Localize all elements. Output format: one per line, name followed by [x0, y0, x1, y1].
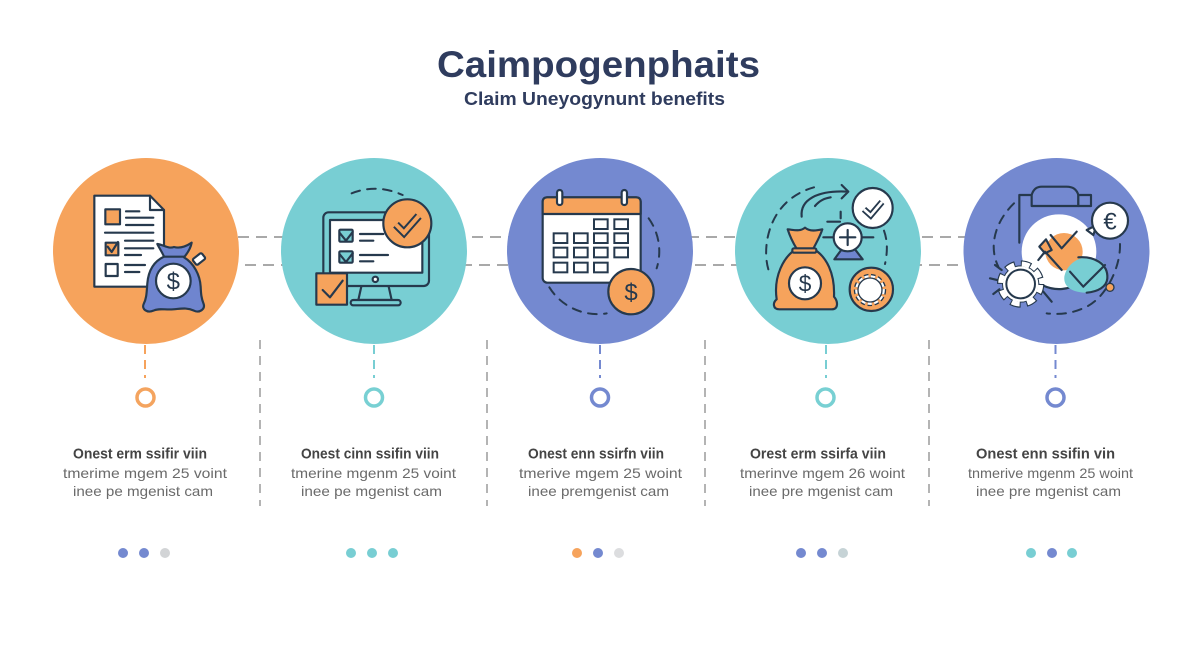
panel: step 2 [281, 158, 467, 558]
step 1 body text: tmerime mgem 25 voint [63, 465, 227, 481]
icon: clipboard, gear, euro and chart: € [1103, 208, 1117, 235]
step 2 heading: Onest cinn ssifin viin [301, 446, 439, 462]
step 1 connector [144, 345, 146, 378]
step 5 body text: inee pre mgenist cam [976, 483, 1121, 499]
step 1 body text: inee pe mgenist cam [73, 483, 213, 499]
step 5 circle [964, 158, 1150, 344]
step 4 body text [740, 465, 905, 499]
step 2 body text: tmerine mgenm 25 voint [291, 465, 456, 481]
step 4 circle [735, 158, 921, 344]
icon: monitor with checklist [316, 189, 431, 305]
step 3 circle [507, 158, 693, 344]
panel: step 1 [53, 158, 239, 558]
step 4 progress dots [796, 548, 848, 558]
step 5 marker ring [1047, 389, 1064, 406]
step 2 circle [281, 158, 467, 344]
step 2 connector [373, 345, 375, 378]
icon: checklist document and money bag: $ [167, 268, 180, 295]
panel: step 4 [735, 158, 921, 558]
step 2 body text: inee pe mgenist cam [301, 483, 442, 499]
step 5 progress dots [1026, 548, 1077, 558]
panel: step 5 [964, 158, 1150, 558]
icon: clipboard, gear, euro and chart [990, 187, 1128, 314]
icon: money bag, gear and check [766, 185, 893, 311]
step 5 body text: tnmerive mgenm 25 woint [968, 465, 1133, 481]
step 3 progress dots [572, 548, 624, 558]
step 3 connector [599, 345, 601, 378]
step 4 marker ring [817, 389, 834, 406]
step 3 body text [519, 465, 682, 499]
step 1 heading: Onest erm ssifir viin [73, 446, 207, 462]
step 2 body text [291, 465, 456, 499]
panel: step 3 [507, 158, 693, 558]
step 4 connector [825, 345, 827, 378]
step 3 marker ring [592, 389, 608, 406]
icon: calendar and coin: $ [624, 279, 638, 306]
step 2 marker ring [366, 389, 382, 406]
step 5 heading: Onest enn ssifin vin [976, 446, 1115, 462]
step 1 body text [63, 465, 227, 499]
icon: money bag, gear and check: $ [799, 271, 812, 297]
step 4 heading: Orest erm ssirfa viin [750, 446, 886, 462]
step 3 body text: inee premgenist cam [528, 483, 669, 499]
step 3 heading: Onest enn ssirfn viin [528, 446, 664, 462]
step 4 body text: tmerinve mgem 26 woint [740, 465, 905, 481]
step 1 circle [53, 158, 239, 344]
step 3 body text: tmerive mgem 25 woint [519, 465, 682, 481]
icon: calendar and coin [543, 190, 659, 314]
step 5 connector [1054, 345, 1056, 378]
step 1 progress dots [118, 548, 170, 558]
step 4 body text: inee pre mgenist cam [749, 483, 893, 499]
subtitle: Claim Uneyogynunt benefits [464, 89, 725, 109]
icon: checklist document and money bag [94, 196, 206, 312]
step 5 body text [968, 465, 1133, 499]
title: Caimpogenphaits [437, 43, 760, 85]
step 2 progress dots [346, 548, 398, 558]
step 1 marker ring [137, 389, 154, 406]
